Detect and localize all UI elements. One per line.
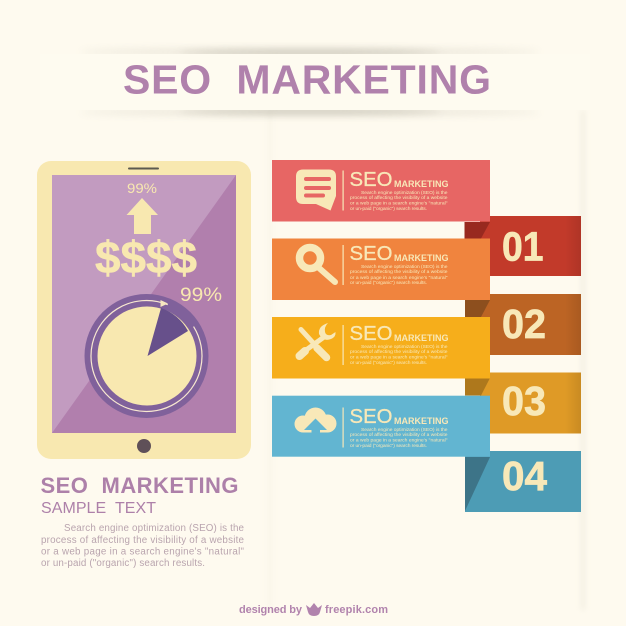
icon: cloud upload [294, 408, 336, 433]
band 3 text: process of affecting the visibility of a website [350, 349, 448, 355]
band 2 text [350, 242, 448, 286]
number tab 04: 04 [502, 453, 547, 499]
percentage label: chart: 99% [180, 284, 222, 306]
side paragraph: process of affecting the visibility of a website [41, 535, 245, 546]
band 4 text [350, 405, 448, 449]
icon: tools [300, 323, 336, 358]
side paragraph: or un-paid ("organic") search results. [41, 558, 205, 569]
band 1: red [272, 160, 490, 222]
side paragraph: Search engine optimization (SEO) is the [64, 523, 245, 534]
band 3 text: SEO [350, 322, 392, 345]
number tab 01 [464, 216, 581, 276]
footer credit: designed by [239, 604, 303, 616]
footer credit: freepik.com [325, 604, 388, 616]
band 4: blue [272, 396, 490, 457]
number tab 02: 02 [502, 301, 546, 347]
band 2 text: Search engine optimization (SEO) is the [361, 264, 448, 270]
band 3 text: or a web page in a search engine's "natural" [350, 354, 448, 360]
band 4 text: SEO [350, 405, 392, 428]
footer credit [239, 603, 388, 616]
band 3 text: MARKETING [394, 333, 448, 343]
band 3 text [350, 322, 448, 366]
band 4 text: MARKETING [394, 416, 448, 426]
band 1 text: SEO [350, 168, 392, 191]
band 4 text: or un-paid ("organic") search results. [350, 443, 427, 449]
title banner [40, 49, 590, 115]
number tab 04 [465, 451, 581, 512]
number tab 01: 01 [502, 224, 544, 270]
number tab 02 [465, 294, 581, 355]
band 3: yellow [272, 317, 490, 378]
percentage label: top: 99% [127, 180, 157, 196]
title banner: SEO MARKETING [123, 56, 491, 102]
icon: up arrow [126, 198, 158, 234]
band 4 text: process of affecting the visibility of a website [350, 432, 448, 438]
side paragraph [41, 523, 245, 569]
icon: crown [306, 603, 322, 616]
band 1 text: or a web page in a search engine's "natural" [350, 200, 448, 206]
band 2: orange [272, 238, 490, 300]
band 4 text: or a web page in a search engine's "natural" [350, 438, 448, 444]
band 4 text: Search engine optimization (SEO) is the [361, 427, 448, 433]
icon: magnifier [300, 248, 335, 282]
band 2 text: or a web page in a search engine's "natural" [350, 275, 448, 281]
dollar signs: $$$$ [95, 232, 197, 283]
icon: speech bubble [296, 170, 336, 210]
band 3 text: Search engine optimization (SEO) is the [361, 344, 448, 350]
side text block [40, 473, 245, 569]
band 1 text: MARKETING [394, 179, 448, 189]
band 1 text [350, 168, 448, 212]
tablet illustration [37, 161, 251, 459]
band 1 text: Search engine optimization (SEO) is the [361, 190, 448, 196]
side subheading: SAMPLE TEXT [41, 500, 156, 517]
band 2 text: MARKETING [394, 253, 448, 263]
band 2 text: SEO [350, 242, 392, 265]
band 2 text: process of affecting the visibility of a website [350, 269, 448, 275]
band 2 text: or un-paid ("organic") search results. [350, 280, 427, 286]
band 1 text: or un-paid ("organic") search results. [350, 206, 427, 212]
band 1 text: process of affecting the visibility of a website [350, 195, 448, 201]
side paragraph: or a web page in a search engine's "natural" [41, 546, 245, 558]
band 3 text: or un-paid ("organic") search results. [350, 360, 427, 366]
number tab 03 [465, 372, 581, 434]
number tab 03: 03 [502, 378, 546, 424]
side heading: SEO MARKETING [40, 473, 238, 498]
pie chart [70, 280, 223, 432]
